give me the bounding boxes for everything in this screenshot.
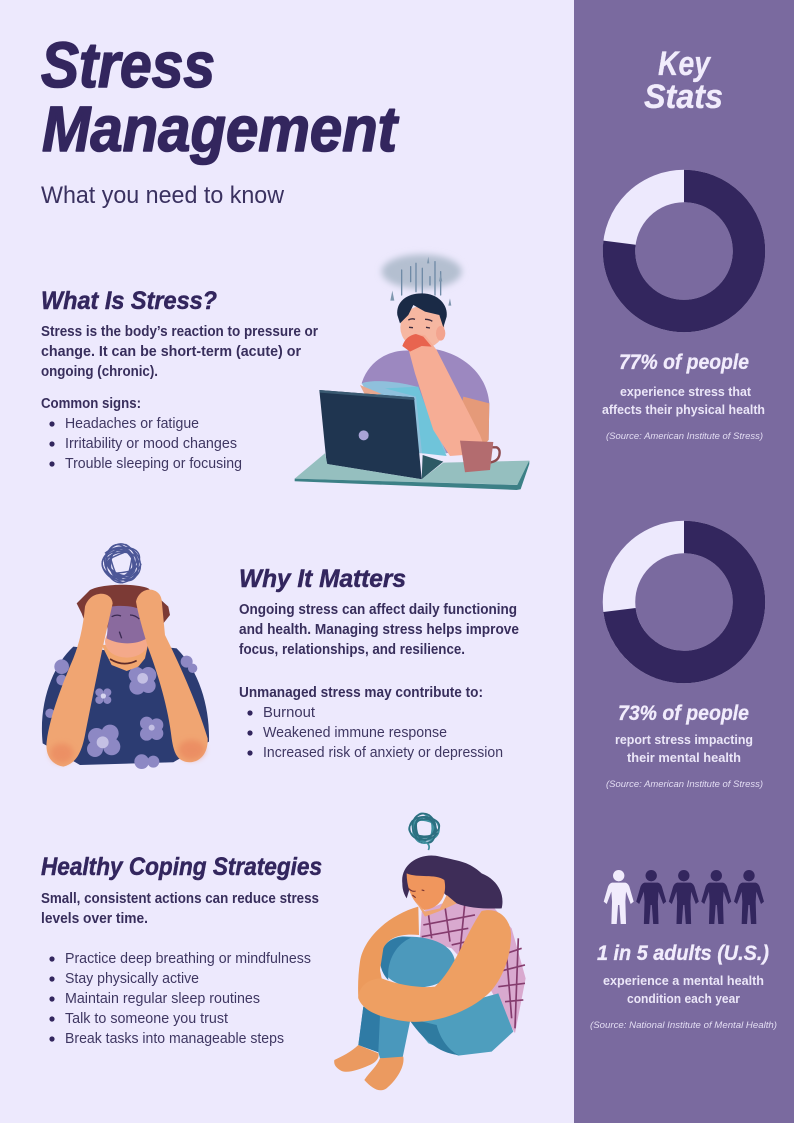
desk bbox=[295, 453, 529, 485]
panel: 77 percent stat bbox=[602, 186, 765, 441]
knee bbox=[380, 936, 455, 988]
heading: what is stress: What Is Stress? bbox=[41, 287, 217, 315]
text block: unmanaged stress heading: Unmanaged stress may contribute to: bbox=[239, 685, 483, 701]
title: Stress bbox=[41, 29, 215, 101]
list: coping strategies: Maintain regular sleep routines bbox=[65, 991, 260, 1007]
list: coping strategies: Talk to someone you trust bbox=[65, 1011, 228, 1027]
list: coping strategies bbox=[49, 951, 311, 1047]
title: Management bbox=[42, 93, 399, 165]
stat description: condition each year bbox=[627, 992, 740, 1006]
glow from screen bbox=[385, 387, 447, 456]
panel: 73 percent stat bbox=[606, 537, 763, 789]
laptop screen bbox=[319, 390, 422, 479]
source note: (Source: National Institute of Mental Health) bbox=[590, 1020, 777, 1030]
face bbox=[107, 606, 147, 643]
panel: 1 in 5 stat bbox=[590, 870, 777, 1030]
torso with floral dress bbox=[42, 645, 209, 765]
text block: why it matters body bbox=[239, 602, 519, 658]
list: consequences: Increased risk of anxiety or depression bbox=[263, 745, 503, 761]
section: healthy coping strategies bbox=[41, 853, 322, 1047]
stat description: report stress impacting bbox=[615, 733, 753, 747]
icon: teal scribble bbox=[408, 811, 441, 850]
panel: key stats sidebar background bbox=[574, 0, 794, 1123]
feet bbox=[334, 1045, 379, 1072]
text block: coping intro: Small, consistent actions can reduce stress bbox=[41, 891, 319, 907]
hair bbox=[402, 856, 502, 909]
text block: definition bbox=[41, 324, 318, 380]
head bbox=[400, 306, 444, 349]
pictogram: five people, one highlighted bbox=[604, 870, 764, 924]
neck and chin bbox=[102, 643, 148, 671]
stat headline: 1 in 5 adults (U.S.) bbox=[597, 942, 769, 965]
list: common signs: Trouble sleeping or focusing bbox=[65, 456, 242, 472]
text block: definition: change. It can be short-term (acute) or bbox=[41, 344, 301, 360]
stat description bbox=[615, 733, 753, 765]
list: coping strategies: Stay physically active bbox=[65, 971, 199, 987]
list: consequences bbox=[247, 705, 503, 761]
illustration: woman hugging knees with scribble bbox=[334, 811, 526, 1090]
list: coping strategies: Break tasks into manageable steps bbox=[65, 1031, 284, 1047]
torso bbox=[362, 349, 489, 453]
source note: (Source: American Institute of Stress) bbox=[606, 779, 763, 789]
stat headline: 73% of people bbox=[618, 702, 749, 725]
illustration: person holding head with scribble bbox=[42, 539, 209, 769]
stat headline: 77% of people bbox=[619, 351, 749, 374]
subtitle: What you need to know bbox=[41, 182, 285, 209]
list: coping strategies: Practice deep breathing or mindfulness bbox=[65, 951, 311, 967]
hair bbox=[77, 585, 170, 638]
list: consequences: Weakened immune response bbox=[263, 725, 447, 741]
heading: key stats bbox=[644, 45, 723, 116]
text block: why it matters body: focus, relationships, and resilience. bbox=[239, 642, 465, 658]
hair bbox=[397, 293, 447, 327]
flowers bbox=[45, 656, 197, 769]
text block: why it matters body: and health. Managing stress helps improve bbox=[239, 622, 519, 638]
heading: healthy coping strategies: Healthy Coping Strategies bbox=[41, 853, 322, 881]
text block: why it matters body: Ongoing stress can affect daily functioning bbox=[239, 602, 517, 618]
donut chart: 77 percent bbox=[619, 186, 749, 316]
stat description: experience stress that bbox=[620, 385, 752, 399]
list: common signs: Headaches or fatigue bbox=[65, 416, 199, 432]
illustration: man at laptop under rain cloud bbox=[295, 254, 529, 490]
heading: key stats: Stats bbox=[644, 78, 723, 116]
title bbox=[41, 29, 399, 165]
arms bbox=[46, 590, 208, 767]
arm and hand bbox=[403, 334, 487, 456]
text block: common signs heading: Common signs: bbox=[41, 396, 141, 412]
seated leg bbox=[408, 993, 513, 1056]
face bbox=[407, 873, 445, 910]
list: common signs bbox=[49, 416, 242, 472]
text block: definition: ongoing (chronic). bbox=[41, 364, 158, 380]
stat description bbox=[602, 385, 765, 417]
section: why it matters bbox=[239, 565, 519, 761]
text block: coping intro bbox=[41, 891, 319, 927]
lower legs bbox=[358, 1007, 410, 1059]
plaid shirt bbox=[420, 898, 526, 1033]
arms bbox=[358, 907, 419, 998]
list: common signs: Irritability or mood changes bbox=[65, 436, 237, 452]
stat description: affects their physical health bbox=[602, 403, 765, 417]
text block: coping intro: levels over time. bbox=[41, 911, 148, 927]
icon: scribble bbox=[97, 539, 147, 589]
stat description: experience a mental health bbox=[603, 974, 764, 988]
heading: key stats: Key bbox=[658, 45, 712, 83]
stat description bbox=[603, 974, 764, 1006]
source note: (Source: American Institute of Stress) bbox=[606, 431, 763, 441]
heading: why it matters: Why It Matters bbox=[239, 565, 406, 593]
donut chart: 73 percent bbox=[619, 537, 749, 667]
icon: rain cloud bbox=[382, 254, 462, 306]
text block: definition: Stress is the body’s reaction to pressure or bbox=[41, 324, 318, 340]
list: consequences: Burnout bbox=[263, 705, 315, 721]
mug bbox=[460, 441, 500, 472]
stat description: their mental health bbox=[627, 751, 741, 765]
section: what is stress bbox=[41, 287, 318, 472]
